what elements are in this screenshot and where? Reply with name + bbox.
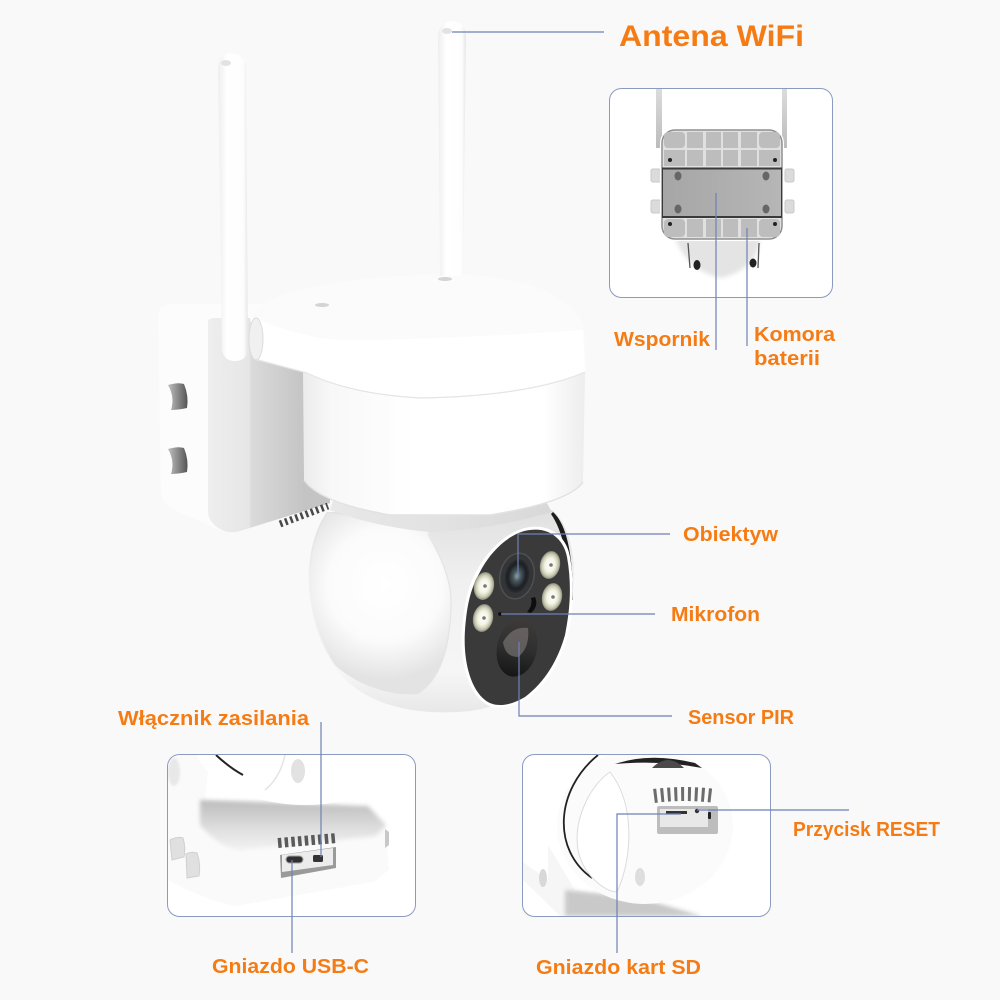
mounting knobs [168,383,188,474]
reset button [695,809,699,813]
leader: microphone [501,613,655,615]
rear antennas [656,88,787,148]
bracket below the ball [523,845,702,916]
infographic canvas [118,24,940,974]
label: reset button: Przycisk RESET [793,819,940,841]
vents [278,838,337,843]
leader: power switch [320,722,322,857]
side indicator [708,812,711,819]
leader: PIR sensor [519,642,672,716]
label: battery compartment: baterii [754,348,820,370]
panel: rear view [610,88,832,298]
label: bracket: Wspornik [614,329,711,351]
metal bracket [662,168,782,218]
main camera illustration [158,21,586,712]
label: power switch: Włącznik zasilania [118,708,310,730]
PIR sensor [491,615,543,681]
USB-C slot [286,856,303,863]
panel: SD card and reset [522,748,770,916]
ball in close-up [215,755,410,805]
front sensor panel [462,527,573,708]
leader: lens [518,534,670,578]
antenna pivot [249,318,263,360]
title label: WiFi antenna: Antena WiFi [619,20,804,53]
label: SD card socket: Gniazdo kart SD [536,957,701,979]
ball head [309,495,574,712]
light sensor [527,597,536,613]
back plate grid [660,128,784,241]
top plate [249,275,586,398]
port recess [657,806,718,834]
leader: USB-C [291,860,293,953]
ball below the mount [675,238,760,278]
leader: SD card [617,814,681,953]
mount box in close-up [168,755,389,850]
LED lights [470,549,565,634]
leader lines [292,32,849,953]
lens [496,550,538,602]
label: battery compartment [754,324,836,370]
camera housing cylinder [303,372,585,515]
knobs in close-up [170,837,200,878]
rotated ball [562,755,702,904]
wall mount box [158,304,340,532]
right antenna [438,21,466,276]
leader: antenna [452,31,604,33]
label: PIR sensor: Sensor PIR [688,707,795,729]
label: lens: Obiektyw [683,524,778,546]
leader: reset [697,809,849,811]
power switch [313,855,323,862]
leader: bracket [715,193,717,350]
label: microphone: Mikrofon [671,604,760,626]
label: USB-C socket: Gniazdo USB-C [212,956,369,978]
left antenna [218,53,248,361]
leader: battery compartment [746,228,748,346]
cooling vents [654,794,715,796]
rear knobs [651,169,794,213]
port cover [280,847,336,878]
microphone hole [498,612,502,616]
SD card slot [666,811,687,814]
label: battery compartment: Komora [754,324,836,346]
panel: power and USB-C ports [167,754,416,917]
